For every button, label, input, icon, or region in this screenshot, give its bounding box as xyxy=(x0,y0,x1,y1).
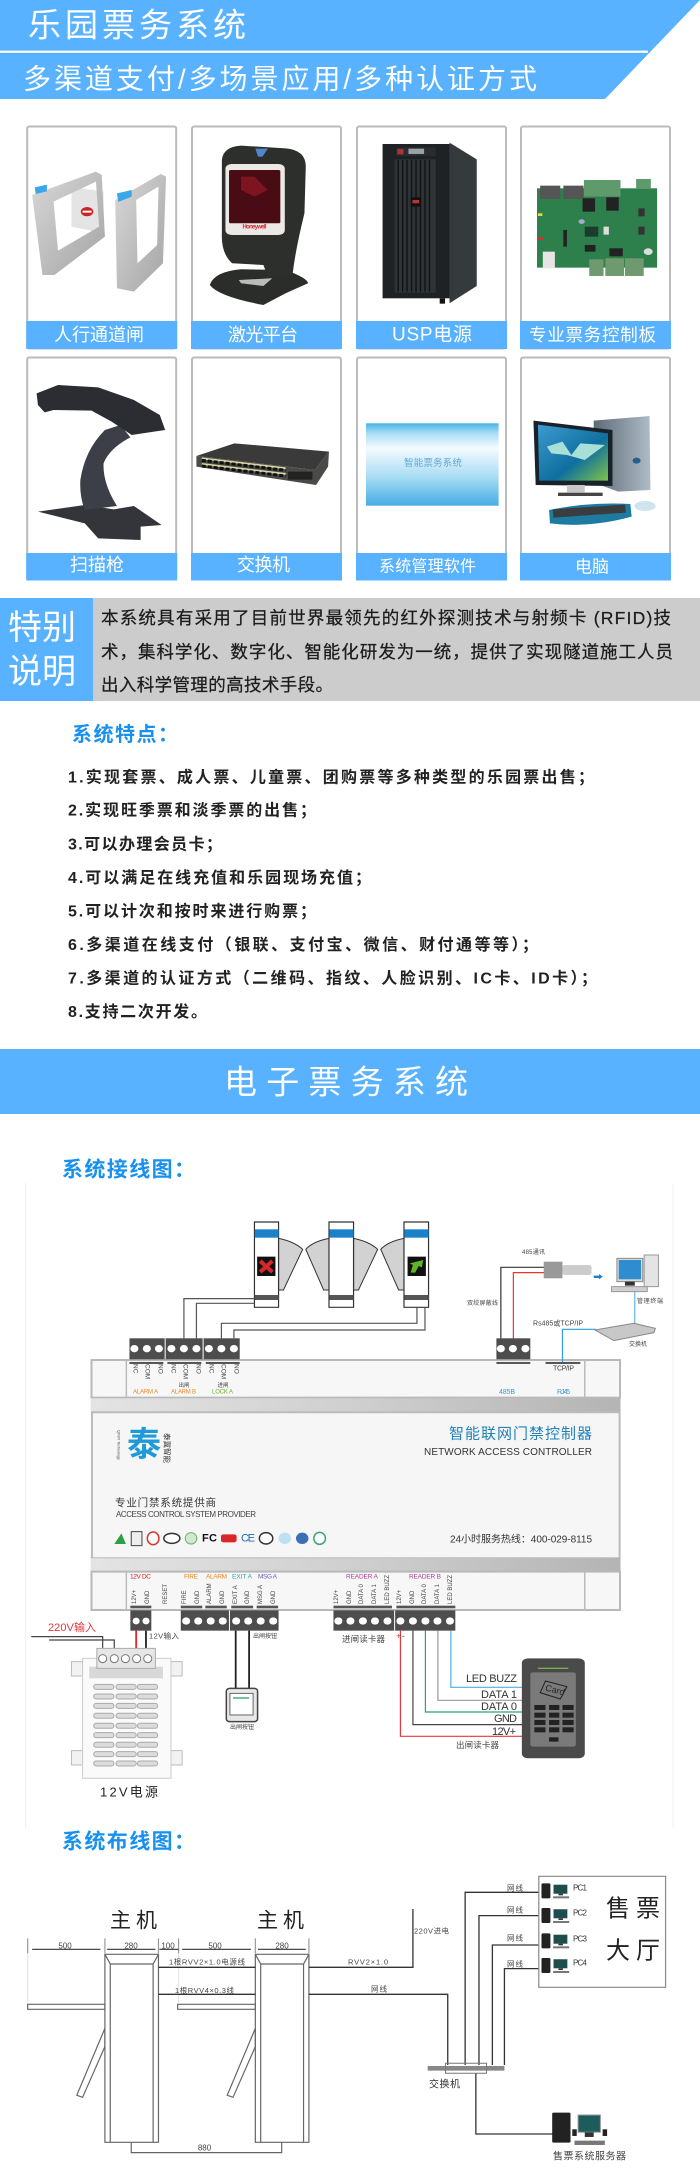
bottom terminal labels xyxy=(130,1574,454,1604)
feature list: 4.可以满足在线充值和乐园现场充值； xyxy=(68,868,371,887)
exit button xyxy=(226,1631,277,1731)
reader B wire labels: + xyxy=(396,1632,401,1640)
icon: card reader xyxy=(522,1658,585,1758)
icon: switch photo xyxy=(196,443,329,485)
cable labels: 网线 xyxy=(507,1882,524,1892)
cable labels: 网线 xyxy=(371,1984,388,1994)
controller panel text: 专业门禁系统提供商 xyxy=(115,1496,216,1509)
reader B wire labels: - xyxy=(402,1632,405,1640)
gate wires xyxy=(184,1299,425,1338)
certification icons: FC xyxy=(202,1532,217,1544)
section banner: electronic ticketing xyxy=(0,1049,700,1114)
card label: 扫描枪 xyxy=(70,555,124,575)
top terminal labels: RJ45 xyxy=(557,1389,570,1396)
PC labels xyxy=(573,1884,588,1968)
reader B wire labels: DATA 1 xyxy=(481,1689,517,1701)
icon: software screen: 智能票务系统 xyxy=(404,457,462,469)
heading: system features: 系统特点： xyxy=(72,722,178,746)
bottom terminal labels: DATA 0 xyxy=(359,1584,365,1604)
RS485 labels: 双绞屏蔽线 xyxy=(467,1299,498,1307)
RS485 labels: Rs485或TCP/IP xyxy=(533,1318,583,1328)
top terminal labels: COM xyxy=(182,1364,188,1379)
host labels xyxy=(110,1910,304,1932)
top terminal labels: NO xyxy=(156,1364,164,1374)
bottom terminal labels: GND xyxy=(410,1590,416,1604)
reader B wire labels: LED BUZZ xyxy=(466,1673,517,1685)
dimension labels: 100 xyxy=(161,1942,175,1950)
card label xyxy=(356,553,507,580)
bottom terminal labels: GND xyxy=(271,1590,277,1604)
bottom terminal labels: GND xyxy=(220,1590,226,1604)
top terminal labels: NO xyxy=(232,1364,240,1374)
card label xyxy=(520,321,671,349)
controller panel text: NETWORK ACCESS CONTROLLER xyxy=(424,1447,592,1458)
host labels: 主机 xyxy=(110,1910,157,1932)
card: laser platform xyxy=(191,126,342,349)
bottom terminal labels: MSG A xyxy=(258,1585,264,1604)
note heading xyxy=(8,609,76,691)
dimension labels: 500 xyxy=(208,1942,222,1950)
cable labels xyxy=(169,1882,524,1995)
card label: 系统管理软件 xyxy=(379,558,476,576)
power labels: 12V输入 xyxy=(149,1630,180,1640)
feature list: 6.多渠道在线支付（银联、支付宝、微信、财付通等等）； xyxy=(68,935,538,954)
top terminal labels: ALARM A xyxy=(133,1390,158,1396)
RS485 labels: 交换机 xyxy=(629,1340,647,1348)
icon: software screen xyxy=(366,423,499,506)
turnstiles xyxy=(28,1938,309,2153)
card: UPS power xyxy=(356,126,507,349)
icon: desktop computer photo xyxy=(533,416,656,525)
bottom terminal labels: 12V+ xyxy=(397,1589,403,1604)
card label: 交换机 xyxy=(237,555,290,575)
cable labels: 网线 xyxy=(507,1958,524,1968)
controller panel text: 智能联网门禁控制器 xyxy=(449,1424,592,1442)
bottom terminal labels: EXIT A xyxy=(233,1585,239,1604)
power wires xyxy=(31,1631,146,1648)
cables xyxy=(158,1892,554,2134)
switch: 交换机 xyxy=(429,2078,460,2090)
feature list xyxy=(68,768,597,1021)
PC labels: PC4 xyxy=(573,1958,588,1968)
cable labels: 1根RVV4×0.3线 xyxy=(175,1985,234,1995)
card: pedestrian gate xyxy=(26,126,177,349)
PC labels: PC3 xyxy=(573,1934,588,1944)
hall label: 售票 xyxy=(606,1896,660,1922)
top terminal labels: ALARM B xyxy=(171,1390,196,1396)
top terminal labels: NC xyxy=(132,1364,138,1374)
PC labels: PC2 xyxy=(573,1908,588,1918)
company logo: QINYI Technology xyxy=(116,1430,122,1460)
top terminal labels: NO xyxy=(194,1364,202,1374)
card: ticket control board xyxy=(520,126,671,349)
reader B wires xyxy=(400,1631,522,1736)
card label xyxy=(191,553,342,580)
feature list: 1.实现套票、成人票、儿童票、团购票等多种类型的乐园票出售； xyxy=(68,768,594,786)
feature list: 8.支持二次开发。 xyxy=(68,1002,207,1021)
bottom terminal labels: MSG A xyxy=(258,1574,278,1580)
reader B wire labels: 出闸读卡器 xyxy=(456,1740,499,1750)
bottom terminal labels: LED BUZZ xyxy=(448,1575,454,1604)
dimension labels: 880 xyxy=(198,2144,212,2152)
dimension labels: 280 xyxy=(124,1942,138,1950)
heading: wiring diagram: 系统接线图： xyxy=(62,1158,195,1182)
bottom terminal labels: GND xyxy=(347,1590,353,1604)
bottom terminal labels: READER B xyxy=(409,1574,441,1580)
top terminal blocks xyxy=(129,1338,580,1364)
feature list: 5.可以计次和按时来进行购票； xyxy=(68,902,316,920)
company logo xyxy=(116,1426,172,1464)
certification icons: CE xyxy=(241,1532,255,1544)
controller body xyxy=(91,1360,620,1610)
icon: UPS cabinet photo xyxy=(383,143,477,304)
feature list: 7.多渠道的认证方式（二维码、指纹、人脸识别、IC卡、ID卡）； xyxy=(68,968,597,988)
card label xyxy=(356,321,507,349)
icon: card reader: Card xyxy=(544,1683,566,1697)
hall label: 大厅 xyxy=(606,1938,660,1964)
top terminal labels: NC xyxy=(170,1364,176,1374)
header banner xyxy=(0,0,700,99)
feature list: 2.实现旺季票和淡季票的出售； xyxy=(68,800,316,820)
top terminal labels: TCP/IP xyxy=(553,1366,574,1372)
reader B wire labels xyxy=(396,1632,517,1750)
bottom terminal labels: EXIT A xyxy=(232,1574,253,1580)
RS485 labels: 485通讯 xyxy=(522,1248,545,1256)
subtitle: 多渠道支付/多场景应用/多种认证方式 xyxy=(23,64,537,94)
company logo: 泰 xyxy=(127,1426,161,1464)
bottom terminal blocks xyxy=(130,1606,455,1631)
card label: USP电源 xyxy=(392,324,472,346)
cable labels: 220V进电 xyxy=(414,1926,450,1936)
card label xyxy=(520,553,671,580)
note heading: 特别 xyxy=(8,609,76,647)
controller panel text xyxy=(115,1424,592,1546)
gate pillars xyxy=(254,1222,429,1307)
card label xyxy=(191,321,342,349)
card label: 电脑 xyxy=(575,558,609,576)
bottom terminal labels: FIRE xyxy=(184,1574,199,1580)
wiring diagram xyxy=(26,1183,673,1828)
switch xyxy=(428,2063,504,2090)
cable labels: 1根RVV2×1.0电源线 xyxy=(169,1956,246,1966)
ticket hall xyxy=(539,1876,666,1987)
bottom terminal labels: GND xyxy=(245,1590,251,1604)
cabling diagram xyxy=(28,1876,666,2162)
exit button: 出闸按钮 xyxy=(253,1632,277,1640)
cable labels: 网线 xyxy=(507,1932,524,1942)
card label: 人行通道闸 xyxy=(54,325,144,345)
reader B wire labels: 12V+ xyxy=(492,1726,516,1738)
top terminal labels: NC xyxy=(208,1364,214,1374)
bottom terminal labels: GND xyxy=(145,1590,151,1604)
top terminal labels xyxy=(132,1364,574,1396)
card label: 专业票务控制板 xyxy=(529,325,656,345)
top terminal labels: 出闸 xyxy=(178,1381,190,1389)
cable labels: 网线 xyxy=(507,1904,524,1914)
note heading: 说明 xyxy=(8,653,76,691)
bottom terminal labels: GND xyxy=(195,1590,201,1604)
controller panel text: 24小时服务热线：400-029-8115 xyxy=(450,1532,592,1546)
reader B wire labels: DATA 0 xyxy=(481,1701,517,1713)
icon: handheld scanner photo xyxy=(37,385,165,540)
bottom terminal labels: 12V DC xyxy=(130,1574,151,1580)
RS485 labels xyxy=(467,1248,663,1348)
company logo: 泰冀智能 xyxy=(162,1433,172,1464)
ticket server xyxy=(552,2113,626,2162)
ticket server: 售票系统服务器 xyxy=(553,2150,626,2162)
cable labels: RVV2×1.0 xyxy=(348,1958,388,1966)
exit button: 出闸按钮 xyxy=(230,1723,254,1731)
note text xyxy=(101,608,673,695)
top terminal labels: LOCK A xyxy=(212,1390,233,1396)
host labels: 主机 xyxy=(257,1910,304,1932)
icon: circuit board photo xyxy=(537,179,657,276)
bottom terminal labels: DATA 1 xyxy=(435,1584,441,1604)
note text: 术，集科学化、数字化、智能化研发为一统，提供了实现隧道施工人员 xyxy=(101,642,673,662)
title: 乐园票务系统 xyxy=(28,6,246,44)
card label: 激光平台 xyxy=(228,325,298,345)
card label xyxy=(26,321,177,349)
dimension labels: 280 xyxy=(275,1942,289,1950)
bottom terminal labels: ALARM xyxy=(207,1583,213,1604)
controller panel text: ACCESS CONTROL SYSTEM PROVIDER xyxy=(116,1510,256,1519)
feature list: 3.可以办理会员卡； xyxy=(68,834,222,854)
power labels: 220V输入 xyxy=(48,1620,96,1634)
power labels: 12V电源 xyxy=(100,1784,158,1800)
section banner: electronic ticketing: 电子票务系统 xyxy=(224,1064,468,1100)
top terminal labels: COM xyxy=(144,1364,150,1379)
dimension labels: 500 xyxy=(58,1942,72,1950)
top terminal labels: 进闸 xyxy=(217,1381,229,1389)
bottom terminal labels: FIRE xyxy=(182,1590,188,1604)
top terminal labels: COM xyxy=(220,1364,226,1379)
power labels xyxy=(48,1620,180,1800)
certification icons xyxy=(114,1532,325,1546)
bottom terminal labels: DATA 1 xyxy=(372,1584,378,1604)
note text: 出入科学管理的高技术手段。 xyxy=(101,675,333,695)
brand text: Honeywell xyxy=(242,224,267,230)
bottom terminal labels: 12V+ xyxy=(132,1589,138,1604)
top terminal labels: 485B xyxy=(499,1389,515,1396)
product grid xyxy=(26,126,671,580)
bottom terminal labels: LED BUZZ xyxy=(385,1575,391,1604)
card: management software xyxy=(356,358,507,580)
bottom terminal labels: READER A xyxy=(346,1574,379,1580)
heading: cabling diagram: 系统布线图： xyxy=(62,1830,195,1854)
card: scan gun xyxy=(26,358,177,580)
dimension labels xyxy=(58,1942,289,2152)
card label xyxy=(26,553,177,580)
bottom terminal labels: ALARM xyxy=(206,1574,227,1580)
icon: 12V power supply xyxy=(71,1648,182,1778)
icon: desktop scanner photo xyxy=(210,146,308,305)
icon: swing gate photo xyxy=(32,172,166,292)
PC labels: PC1 xyxy=(573,1884,588,1892)
hall label xyxy=(606,1896,660,1964)
bottom terminal labels: RESET xyxy=(163,1584,169,1604)
bottom terminal labels: DATA 0 xyxy=(422,1584,428,1604)
reader B wire labels: GND xyxy=(494,1713,517,1725)
RS485 link and terminal xyxy=(501,1255,658,1362)
note text: 本系统具有采用了目前世界最领先的红外探测技术与射频卡 (RFID)技 xyxy=(101,608,671,628)
panel: special note xyxy=(0,598,700,701)
RS485 labels: 管理终端 xyxy=(637,1297,663,1305)
bottom terminal labels: 12V+ xyxy=(334,1589,340,1604)
card: computer xyxy=(520,358,671,580)
reader A label: 进闸读卡器 xyxy=(342,1634,385,1644)
card: network switch xyxy=(191,358,342,580)
